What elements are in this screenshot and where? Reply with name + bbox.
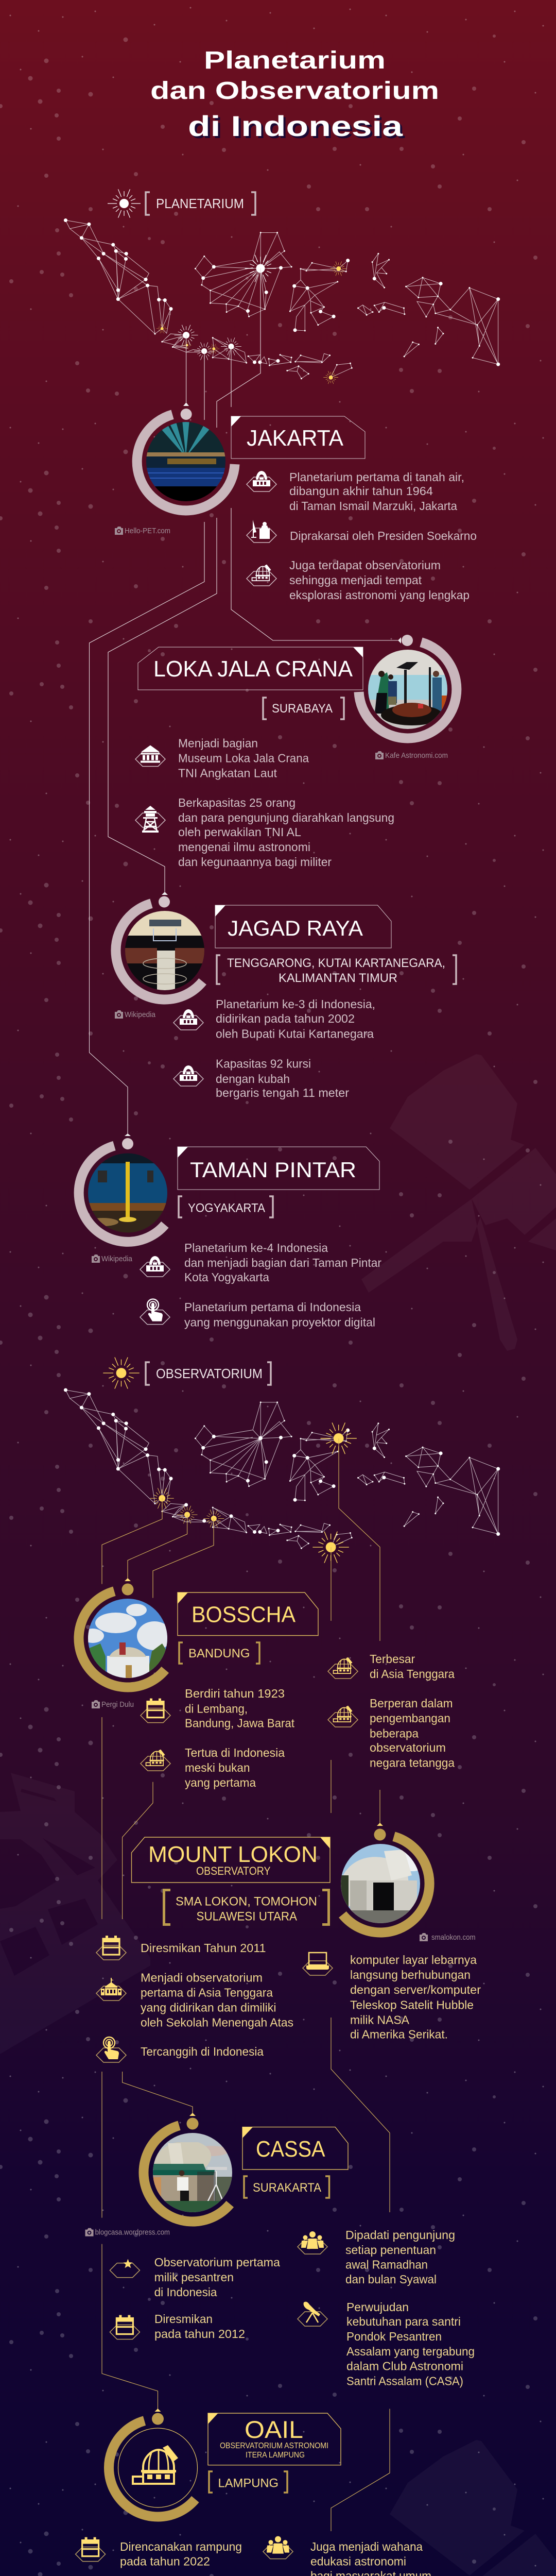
panel: oail: [76, 2409, 431, 2576]
text: education: Juga menjadi wahana: [310, 2540, 423, 2553]
text: role: Berperan dalam: [370, 1697, 453, 1710]
heading box: CASSA: [256, 2137, 325, 2162]
location: [244, 2176, 329, 2198]
text: education: edukasi astronomi: [310, 2555, 406, 2568]
text: planned: [120, 2540, 242, 2568]
location: YOGYAKARTA: [188, 1201, 265, 1215]
text: oldest: yang pertama: [185, 1776, 256, 1789]
icon: observatory: [328, 1657, 358, 1679]
text: visitors: dan bulan Syawal: [345, 2273, 437, 2286]
title: dan Observatorium: [150, 77, 439, 105]
ring: [359, 642, 457, 738]
icon: people: [298, 2231, 327, 2254]
heading box: JAGAD RAYA: [228, 916, 363, 940]
text: largest: Terbesar: [370, 1652, 415, 1666]
heading box: [178, 1147, 379, 1190]
text: third planetarium: didirikan pada tahun 2002: [216, 1012, 355, 1025]
text: founded: Bandung, Jawa Barat: [185, 1717, 295, 1730]
text: first planetarium: Planetarium pertama di tanah air,: [289, 470, 464, 484]
icon: lectern: [247, 520, 276, 543]
icon: building: [173, 1065, 203, 1086]
watermark: telescope upper right: [361, 1054, 556, 1351]
location: SURAKARTA: [253, 2181, 321, 2195]
text: role: beberapa: [370, 1727, 419, 1740]
text: first planetarium: [289, 470, 464, 513]
icon: observatory in circle: [118, 2428, 198, 2507]
location: [164, 1890, 328, 1925]
ring: [79, 1591, 165, 1687]
photo credit: blogcasa.wordpress.com: [95, 2228, 170, 2237]
location: SULAWESI UTARA: [197, 1909, 297, 1924]
text: observatory: eksplorasi astronomi yang lengkap: [289, 588, 470, 602]
text: visitors: awal Ramadhan: [345, 2258, 428, 2272]
text: oldest: [185, 1746, 285, 1789]
photo: mount lokon: [341, 1844, 420, 1923]
marker: [186, 2113, 199, 2130]
heading box: [178, 1592, 318, 1635]
icon: tower: [135, 806, 165, 833]
section label: planetarium: PLANETARIUM: [156, 196, 244, 211]
text: largest: di Asia Tenggara: [370, 1667, 455, 1681]
heading box: [215, 905, 391, 948]
text: first planetarium: di Taman Ismail Marzuki, Jakarta: [289, 499, 457, 513]
photo: taman pintar: [88, 1153, 167, 1234]
text: inaugurated: Diresmikan Tahun 2011: [141, 1941, 266, 1955]
text: club: dalam Club Astronomi: [346, 2360, 463, 2373]
heading box: LOKA JALA CRANA: [153, 656, 353, 682]
location: SMA LOKON, TOMOHON: [176, 1895, 317, 1908]
location: TENGGARONG, KUTAI KARTANEGARA,: [227, 956, 445, 970]
icon: school: [96, 1978, 126, 2001]
marker: [122, 1133, 133, 1149]
text: third planetarium: [216, 997, 375, 1041]
heading box: ITERA LAMPUNG: [246, 2451, 305, 2460]
location: [209, 2471, 287, 2493]
text: founded: Berdiri tahun 1923: [185, 1687, 285, 1700]
location: BANDUNG: [188, 1647, 250, 1660]
panel: cassa: [85, 2113, 475, 2388]
text: school owned: Menjadi observatorium: [141, 1971, 263, 1984]
text: role: negara tetangga: [370, 1756, 455, 1770]
icon: observatory: [247, 565, 276, 586]
text: hubble link: komputer layar lebarnya: [350, 1953, 477, 1967]
text: museum: [178, 737, 309, 780]
text: club: Santri Assalam (CASA): [346, 2375, 463, 2388]
icon: hand pointer: [140, 1299, 170, 1325]
panel: jakarta: [115, 402, 477, 602]
text: oldest: Tertua di Indonesia: [185, 1746, 285, 1759]
text: school owned: yang didirikan dan dimiliki: [141, 2001, 276, 2014]
map: planetarium constellation: [65, 221, 498, 384]
text: fourth planetarium: dan menjadi bagian dari Taman Pintar: [184, 1256, 381, 1269]
photo credit: Hello-PET.com: [125, 527, 170, 535]
ring: [137, 415, 235, 511]
text: oldest: meski bukan: [185, 1761, 250, 1774]
text: founded: di Lembang,: [185, 1702, 248, 1716]
text: capacity: Berkapasitas 25 orang: [178, 796, 296, 809]
icon: museum: [135, 745, 165, 767]
heading box: TAMAN PINTAR: [190, 1158, 356, 1182]
text: capacity: Kapasitas 92 kursi: [216, 1057, 311, 1071]
photo credit: smalokon.com: [431, 1933, 476, 1942]
text: capacity: [178, 796, 394, 869]
heading box: [132, 1837, 330, 1883]
text: capacity: dengan kubah: [216, 1072, 290, 1086]
ring: [116, 904, 203, 999]
text: capacity: oleh perwakilan TNI AL: [178, 825, 301, 839]
text: role: observatorium: [370, 1741, 446, 1754]
location: [179, 1196, 273, 1217]
heading box: OBSERVATORIUM ASTRONOMI: [220, 2442, 328, 2450]
panel: loka jala crana: [135, 635, 457, 869]
heading box: OBSERVATORY: [196, 1865, 271, 1877]
location: [179, 1642, 259, 1664]
text: observatory: Juga terdapat observatorium: [289, 558, 441, 572]
text: pesantren: [154, 2256, 280, 2299]
text: pesantren: milik pesantren: [154, 2270, 234, 2284]
text: visitors: setiap penentuan: [345, 2243, 436, 2257]
photo credit: Kafe Astronomi.com: [385, 751, 448, 760]
ring: [109, 2421, 195, 2517]
text: club: [346, 2300, 475, 2388]
photo: jagad raya: [125, 911, 204, 991]
photo credit: Wikipedia: [101, 1255, 133, 1263]
text: observatory: [289, 558, 470, 602]
text: hubble link: milik NASA: [350, 2013, 410, 2027]
location: LAMPUNG: [218, 2476, 279, 2490]
marker: [181, 402, 192, 420]
connector: planetarium routes: [90, 268, 398, 1133]
text: capacity: bergaris tengah 11 meter: [216, 1086, 349, 1099]
icon: building: [173, 1009, 203, 1030]
section label: observatorium: OBSERVATORIUM: [156, 1366, 263, 1381]
text: founded: [185, 1687, 295, 1730]
text: inaugurated: Diresmikan: [154, 2312, 213, 2326]
panel: bosscha: [79, 1578, 455, 1789]
text: fourth planetarium: Kota Yogyakarta: [184, 1270, 269, 1284]
text: hubble link: [350, 1953, 481, 2041]
icon: calendar: [141, 1699, 170, 1723]
ring: [79, 1146, 165, 1242]
icon: hand pointer: [96, 2037, 126, 2062]
heading box: [138, 647, 363, 690]
ring: [144, 2126, 230, 2222]
text: capacity: dan para pengunjung diarahkan langsung: [178, 811, 394, 824]
text: club: Assalam yang tergabung: [346, 2345, 475, 2358]
text: education: [310, 2540, 431, 2576]
text: museum: TNI Angkatan Laut: [178, 767, 277, 780]
text: hubble link: dengan server/komputer: [350, 1983, 481, 1996]
text: capacity: [216, 1057, 349, 1099]
heading box: [242, 2127, 348, 2170]
icon: observatory: [141, 1750, 170, 1771]
panel: jagad raya: [115, 892, 456, 1099]
text: hubble link: di Amerika Serikat.: [350, 2028, 448, 2041]
text: capacity: mengenai ilmu astronomi: [178, 840, 310, 854]
watermark: observatory dome left: [0, 1773, 150, 2054]
heading box: [208, 2413, 341, 2465]
panel: taman pintar: [79, 1133, 381, 1329]
icon: planetarium building: [247, 471, 276, 492]
title: di Indonesia: [190, 112, 405, 144]
title: [150, 47, 439, 144]
text: pesantren: di Indonesia: [154, 2285, 217, 2299]
text: pesantren: Observatorium pertama: [154, 2256, 280, 2269]
icon: people: [263, 2536, 293, 2559]
location: [217, 955, 456, 985]
location: [263, 698, 344, 719]
panel: mount lokon: [96, 1823, 481, 2062]
text: digital projector: Planetarium pertama di Indonesia: [184, 1300, 361, 1314]
text: visitors: [345, 2228, 455, 2286]
section label: planetarium: [108, 189, 255, 218]
text: digital projector: yang menggunakan proyektor digital: [184, 1316, 375, 1329]
text: capacity: dan kegunaannya bagi militer: [178, 855, 332, 869]
ring: [342, 1837, 429, 1933]
text: hubble link: Teleskop Satelit Hubble: [350, 1998, 474, 2011]
icon: moon and star: [110, 2255, 140, 2278]
icon: calendar: [76, 2537, 106, 2562]
icon: calendar: [96, 1936, 126, 1960]
section label: observatorium: [103, 1358, 271, 1388]
icon: laptop: [303, 1953, 333, 1975]
icon: calendar: [110, 2315, 140, 2339]
marker: [374, 1823, 386, 1840]
photo credit: Pergi Dulu: [101, 1700, 134, 1709]
title: Planetarium: [204, 47, 386, 74]
text: third planetarium: oleh Bupati Kutai Kartanegara: [216, 1027, 374, 1041]
watermark: telescope lower right: [361, 2440, 556, 2576]
text: school owned: pertama di Asia Tenggara: [141, 1986, 273, 1999]
title: di Indonesia: [188, 110, 403, 142]
location: KALIMANTAN TIMUR: [279, 971, 397, 985]
text: observatory: sehingga menjadi tempat: [289, 573, 422, 587]
text: fourth planetarium: [184, 1241, 381, 1284]
marker: [159, 892, 170, 908]
text: fourth planetarium: Planetarium ke-4 Indonesia: [184, 1241, 328, 1255]
icon: telescope: [298, 2302, 327, 2326]
text: digital projector: [184, 1300, 375, 1329]
icon: observatory: [328, 1706, 358, 1727]
text: most advanced: Tercanggih di Indonesia: [141, 2045, 264, 2058]
text: third planetarium: Planetarium ke-3 di Indonesia,: [216, 997, 375, 1011]
text: inaugurated: [154, 2312, 245, 2341]
text: club: Perwujudan: [346, 2300, 409, 2314]
text: museum: Menjadi bagian: [178, 737, 258, 750]
text: hubble link: langsung berhubungan: [350, 1968, 471, 1981]
map: observatorium constellation: [65, 1390, 498, 1563]
text: planned: Direncanakan rampung: [120, 2540, 242, 2553]
marker: [398, 635, 413, 646]
photo: cassa: [153, 2133, 232, 2215]
text: club: kebutuhan para santri: [346, 2315, 461, 2328]
heading box: MOUNT LOKON: [148, 1842, 318, 1867]
photo: bosscha observatory: [88, 1599, 167, 1678]
text: inaugurated: pada tahun 2012: [154, 2327, 245, 2341]
text: planned: pada tahun 2022: [120, 2555, 210, 2568]
photo: jakarta planetarium: [146, 420, 225, 502]
icon: building: [140, 1256, 170, 1277]
location: SURABAYA: [272, 702, 333, 716]
marker: [152, 2409, 164, 2425]
text: soekarno: Diprakarsai oleh Presiden Soekarno: [290, 529, 477, 543]
text: role: pengembangan: [370, 1711, 450, 1725]
photo: loka jala crana: [368, 650, 448, 731]
heading box: JAKARTA: [247, 426, 344, 451]
text: largest: [370, 1652, 455, 1681]
heading box: OAIL: [245, 2416, 303, 2443]
marker: [121, 1578, 134, 1595]
text: museum: Museum Loka Jala Crana: [178, 752, 309, 765]
heading box: BOSSCHA: [192, 1602, 296, 1627]
text: school owned: oleh Sekolah Menengah Atas: [141, 2016, 293, 2029]
heading box: [231, 416, 365, 459]
text: club: Pondok Pesantren: [346, 2330, 442, 2343]
text: role: [370, 1697, 455, 1770]
text: visitors: Dipadati pengunjung: [345, 2228, 455, 2242]
text: school owned: [141, 1971, 293, 2029]
photo credit: Wikipedia: [125, 1010, 156, 1019]
text: first planetarium: dibangun akhir tahun 1964: [289, 484, 433, 498]
connector: observatorium routes: [102, 1438, 390, 2576]
